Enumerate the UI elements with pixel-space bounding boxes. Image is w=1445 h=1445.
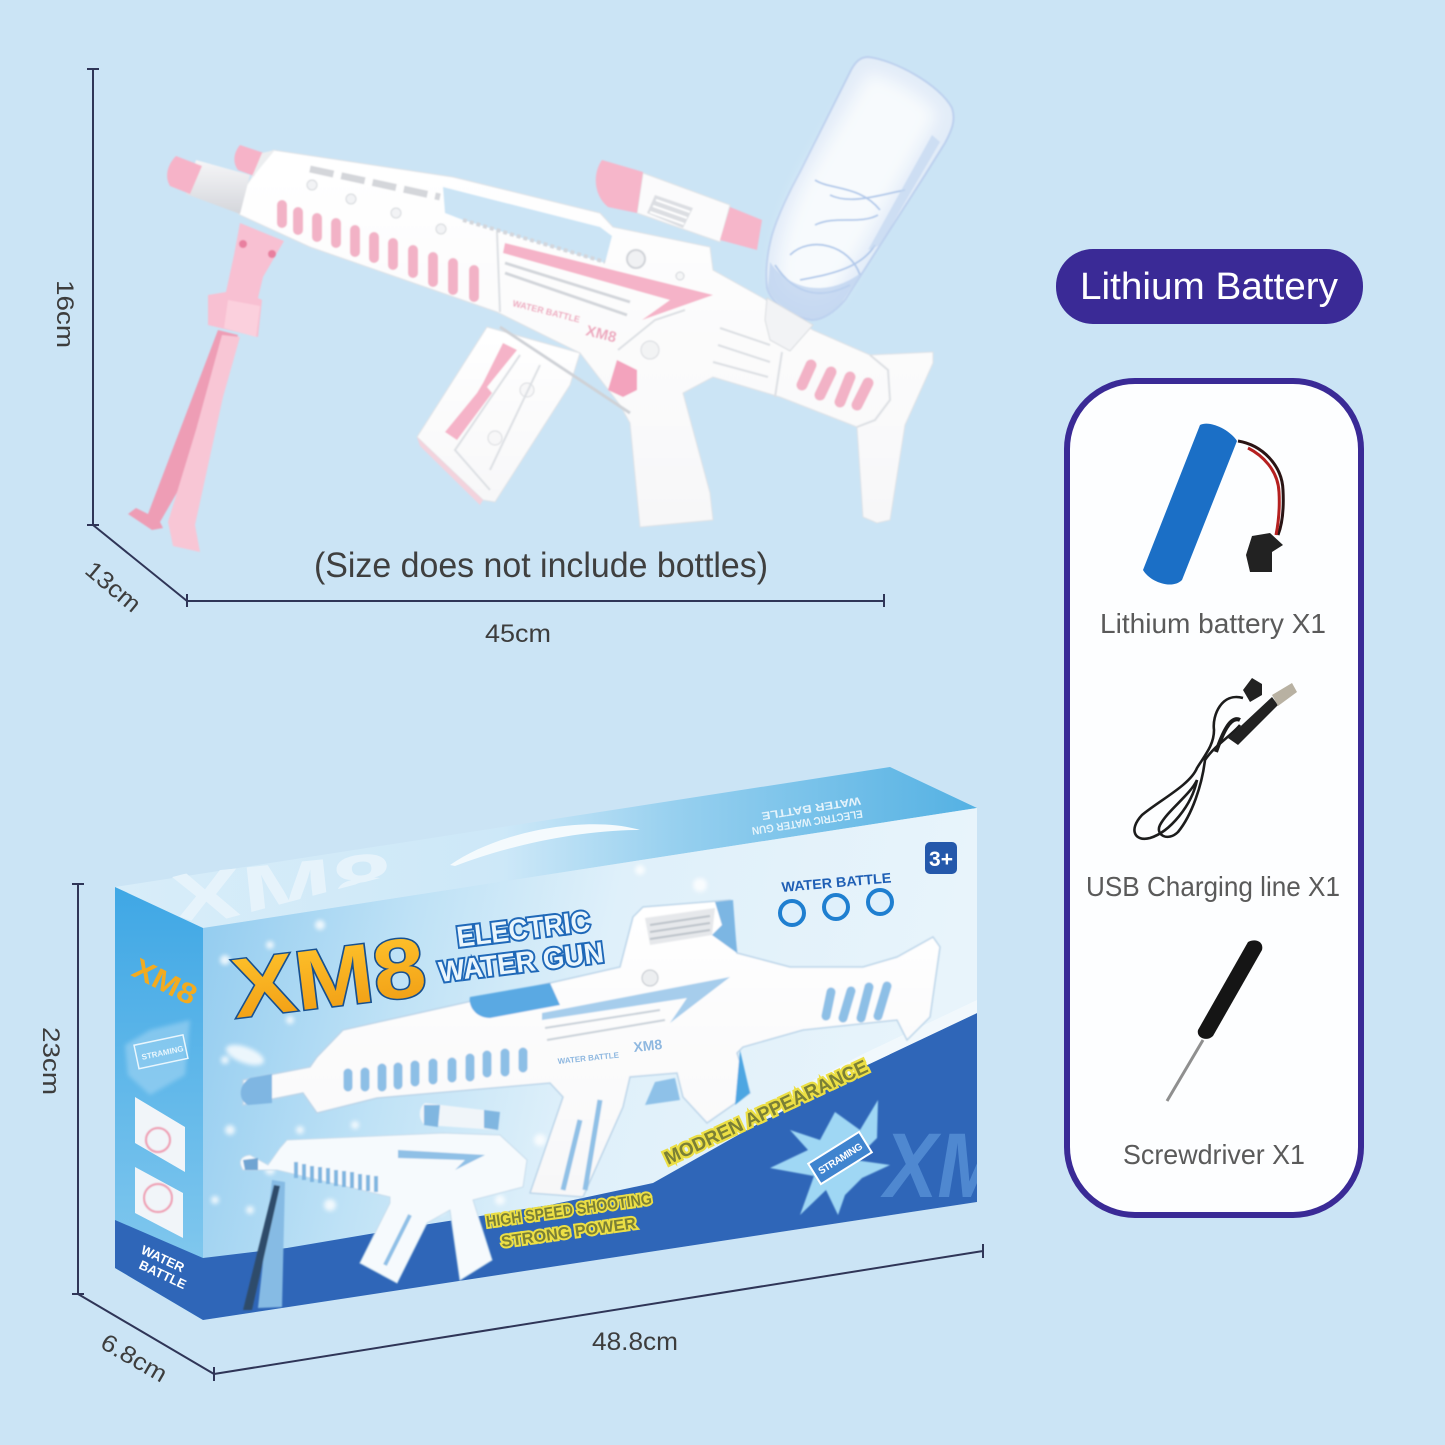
body panel lines [505,263,630,315]
panel: accessories [1067,381,1361,1215]
label: 13cm: 13cm [80,556,146,618]
logo: XM8 [227,919,431,1036]
box gun label: WATER BATTLE [557,1051,620,1066]
side band text: WATER [139,1242,187,1275]
side band text: BATTLE [137,1257,189,1292]
picatinny rail [463,220,605,262]
upper handguard grey rail [310,169,440,197]
water gun illustration [128,57,954,552]
label: 45cm: 45cm [485,620,551,648]
label: battery: Lithium battery X1 [1100,608,1326,639]
gap between rail and body [443,187,612,263]
muzzle: upper [234,145,264,176]
dimension lines: water gun [87,69,884,607]
side splash badge: STRAMING [141,1044,184,1062]
barrel [186,160,250,214]
gun model label: XM8 [584,322,618,346]
side image panels [135,1097,185,1238]
size note: (Size does not include bottles) [314,546,768,585]
magazine [417,327,580,505]
side splash badge [125,1020,190,1095]
icon: screwdriver [1167,940,1262,1101]
watermark XM: XM [880,1115,1006,1217]
trigger guard [500,327,630,413]
large gun on box [241,900,940,1197]
front sparkles [211,865,707,1215]
box top text [751,794,863,836]
splash [770,1100,890,1215]
barrel stub [250,150,275,180]
box side [115,887,203,1320]
label: USB: USB Charging line X1 [1086,871,1340,902]
box handle [450,824,640,866]
yellow slogan: appearance: MODREN APPEARANCE [661,1057,871,1170]
handguard slots [282,205,474,297]
label: 23cm: 23cm [37,1027,64,1095]
badge: Lithium Battery [1056,249,1363,324]
side band text [137,1242,189,1292]
box gun model label: XM8 [633,1036,663,1055]
electric water gun title: ELECTRIC [455,906,592,954]
trigger [608,360,637,397]
box side band [115,1220,203,1320]
icon: water bottle [766,57,954,320]
label: 6.8cm: 6.8cm [96,1329,172,1388]
box top [115,767,977,928]
yellow slogan: power: STRONG POWER [500,1215,638,1251]
box top watermark: XM8 [165,838,397,941]
icon: lithium battery [1143,424,1283,585]
icon: bipod [128,223,284,552]
icon: USB cable [1134,678,1297,839]
bottle adapter [765,298,813,351]
gun body [232,150,933,527]
small gun on box [240,1103,527,1310]
pink body stripe [503,243,713,320]
splash: STRAMING [817,1141,865,1177]
label: screwdriver: Screwdriver X1 [1123,1139,1305,1170]
water gun title line: WATER GUN [437,937,606,989]
handguard holes [307,180,446,234]
side logo: XM8 [127,953,202,1012]
side panel accents [144,1128,172,1212]
band highlight [760,1000,977,1118]
yellow slogan: shooting: HIGH SPEED SHOOTING [485,1191,653,1231]
blue lower band [203,1013,977,1320]
feature heading: WATER BATTLE [781,869,892,895]
stock slots [802,365,868,405]
gun label: WATER BATTLE [512,298,581,325]
label: 48.8cm: 48.8cm [592,1328,678,1356]
badge: Lithium Battery: Lithium Battery [1080,266,1338,308]
box front [203,808,977,1320]
scope [596,160,762,250]
age badge [925,842,957,874]
age badge: 3+ [929,848,953,871]
box top text: ELECTRIC WATER GUN [751,807,863,836]
product box [115,767,1006,1320]
box top text: WATER BATTLE [761,794,861,822]
dimension lines: box [72,884,983,1381]
muzzle: lower [167,156,202,194]
label: 16cm: 16cm [51,280,78,348]
feature icons [780,890,892,925]
